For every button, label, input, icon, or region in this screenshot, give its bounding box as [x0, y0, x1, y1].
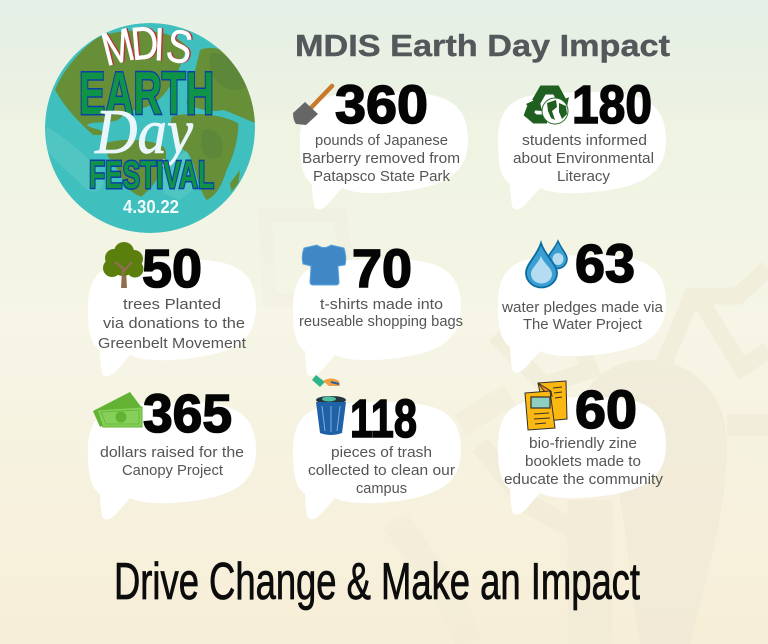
text: The Water Project — [523, 317, 642, 333]
panel: 180 students — [498, 75, 666, 210]
logo text: FESTIVAL: FESTIVAL — [89, 154, 214, 197]
logo text: Day: Day — [94, 96, 194, 167]
logo text: MDIS: D — [129, 16, 160, 70]
number: 360 — [335, 75, 428, 135]
text — [100, 445, 244, 479]
icon: trash can — [312, 375, 346, 435]
logo text: MDIS: S — [164, 19, 198, 74]
logo text: MDIS: M — [98, 18, 141, 76]
icon: water drops — [526, 241, 567, 288]
number: 118 — [350, 389, 417, 449]
text — [504, 436, 664, 488]
panel: 365 dollars — [88, 384, 256, 520]
text: Literacy — [557, 169, 611, 185]
text: pounds of Japanese — [315, 133, 448, 149]
text: water pledges made via — [501, 300, 664, 316]
text: students informed — [522, 133, 647, 149]
text: t-shirts made into — [320, 297, 443, 313]
text: Patapsco State Park — [313, 169, 451, 185]
icon: recycling globe — [526, 90, 569, 124]
text: about Environmental — [513, 151, 654, 167]
logo text: date: 4.30.22 — [123, 197, 179, 217]
number: 50 — [142, 239, 202, 299]
panel: 60 zine booklets — [498, 380, 666, 515]
number: 70 — [352, 239, 412, 299]
number: 63 — [575, 234, 635, 294]
logo text: MDIS: I — [153, 18, 165, 70]
panel: 360 pounds — [293, 75, 468, 210]
globe — [45, 23, 257, 233]
icon: money — [93, 392, 142, 427]
text: pieces of trash — [331, 445, 432, 461]
text — [513, 133, 654, 185]
text: educate the community — [504, 472, 664, 488]
logo text: EARTH: EARTH — [79, 60, 214, 127]
text: trees Planted — [123, 297, 221, 313]
text — [501, 300, 664, 333]
background watermark — [265, 215, 768, 644]
icon: shovel — [293, 86, 332, 125]
text: bio-friendly zine — [529, 436, 637, 452]
number: 180 — [572, 75, 652, 135]
panel: 70 t-shirts — [293, 239, 463, 377]
text: booklets made to — [525, 454, 641, 470]
number: 365 — [143, 384, 232, 444]
panel: 118 pieces of trash — [293, 375, 461, 520]
icon: t-shirt — [302, 245, 346, 285]
title: MDIS Earth Day Impact — [295, 28, 670, 63]
logo text: MDIS: M — [96, 18, 139, 76]
number: 60 — [575, 380, 637, 440]
logo text: MDIS: I — [155, 18, 167, 70]
text — [98, 297, 246, 352]
text: Greenbelt Movement — [98, 336, 246, 352]
text: collected to clean our — [308, 463, 455, 479]
icon: zine booklets — [525, 381, 567, 430]
logo: globe badge — [45, 16, 257, 233]
text: via donations to the — [103, 316, 245, 332]
panel: 50 trees — [88, 239, 256, 377]
text: Canopy Project — [122, 463, 223, 479]
text: dollars raised for the — [100, 445, 244, 461]
icon: tree — [103, 242, 144, 288]
panel: 63 water pledges — [498, 234, 666, 373]
logo text: MDIS: S — [163, 19, 196, 74]
text: campus — [356, 481, 407, 497]
text — [299, 297, 463, 330]
logo text: MDIS — [96, 16, 198, 76]
logo text: MDIS: D — [130, 16, 162, 70]
text: reuseable shopping bags — [299, 314, 463, 330]
text: Barberry removed from — [302, 151, 460, 167]
text — [308, 445, 455, 497]
text — [302, 133, 460, 185]
